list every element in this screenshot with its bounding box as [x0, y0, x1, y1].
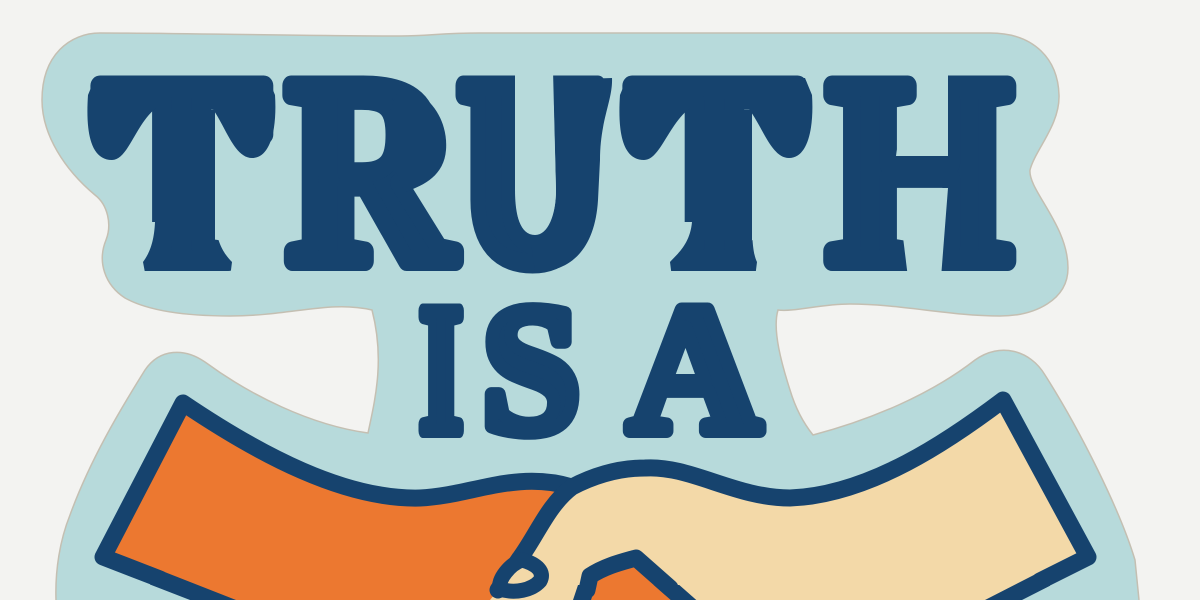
letter T: T: [628, 23, 801, 320]
words: IS A: [419, 267, 761, 472]
left orange hand: [103, 403, 572, 600]
groovy letter trims: [118, 70, 948, 278]
letter T: T: [96, 22, 268, 319]
word: TRUTH: [87, 22, 1011, 320]
fingertip: [500, 560, 541, 591]
letter U: U: [458, 23, 603, 320]
inner orange finger gap: [573, 558, 696, 600]
handshake: [103, 400, 1088, 600]
letter A: A: [628, 267, 761, 471]
letter R: R: [287, 23, 456, 320]
right cream hand: [490, 400, 1088, 600]
groovy letter additions: [87, 78, 812, 272]
letter H: H: [828, 22, 1011, 319]
letter I: I: [419, 269, 463, 472]
letter S: S: [482, 268, 580, 472]
